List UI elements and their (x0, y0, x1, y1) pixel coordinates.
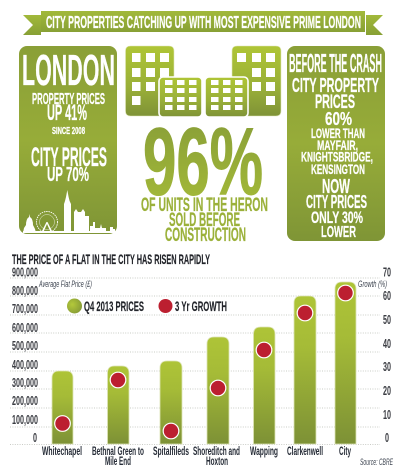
left axis labels: 700,000 (12, 302, 38, 316)
right axis labels: 50 (383, 313, 391, 327)
icon: centre left building (159, 77, 202, 117)
panel: before the crash: MAYFAIR, (317, 138, 358, 153)
bar: Wapping (254, 327, 275, 444)
bar: City (335, 282, 356, 444)
panel: London prices (19, 46, 117, 234)
left axis labels: 500,000 (12, 339, 38, 353)
right axis labels: 10 (383, 408, 391, 422)
panel: London prices: CITY PRICES (31, 142, 107, 172)
legend: 3 Yr GROWTH (175, 298, 227, 314)
icon: left tall building (126, 46, 174, 116)
text: LONDON (22, 46, 115, 95)
statistic caption: CONSTRUCTION (165, 225, 246, 246)
panel: London prices: SINCE 2008 (52, 126, 85, 137)
statistic caption: OF UNITS IN THE HERON (141, 195, 268, 216)
axis title: average flat price: Average Flat Price (£) (38, 279, 92, 289)
icon: London skyline (23, 190, 115, 233)
category labels: Wapping (250, 446, 278, 458)
right axis labels: 40 (383, 337, 391, 351)
category labels: Bethnal Green to (92, 446, 144, 458)
panel: before the crash: ONLY 30% (311, 208, 363, 227)
right axis labels: 60 (383, 289, 391, 303)
panel: before the crash: 60% (325, 109, 352, 129)
icon: centre right building (205, 77, 248, 117)
right axis labels: 70 (383, 266, 391, 280)
panel: before the crash: PRICES (315, 91, 355, 113)
category labels: Mile End (105, 456, 131, 468)
category labels: Spitalfileds (153, 446, 189, 458)
panel: London prices: UP 70% (47, 163, 89, 186)
category labels: City (339, 446, 351, 458)
right axis labels: 0 (385, 431, 389, 445)
legend: Q4 2013 PRICES (84, 298, 144, 314)
left axis labels: 200,000 (12, 394, 38, 408)
left axis labels (12, 266, 38, 445)
panel: before the crash: LOWER (321, 224, 356, 241)
panel: before the crash: KENSINGTON (311, 162, 365, 177)
big statistic 96%: 96% (143, 108, 263, 216)
category labels: Hoxton (206, 456, 228, 468)
category labels: Shoreditch and (193, 446, 240, 458)
right axis labels: 20 (383, 384, 391, 398)
legend (67, 298, 227, 314)
statistic caption: SOLD BEFORE (169, 210, 240, 231)
left axis labels: 100,000 (12, 413, 38, 427)
panel: London prices: UP 41% (47, 100, 87, 125)
icon: right tall building (232, 46, 281, 116)
panel: before the crash: LOWER THAN (311, 126, 365, 141)
left axis labels: 800,000 (12, 284, 38, 298)
panel: London prices: PROPERTY PRICES (32, 91, 105, 108)
left axis labels: 0 (33, 431, 37, 445)
chart heading: THE PRICE OF A FLAT IN THE CITY HAS RISEN RAPIDLY (12, 251, 210, 267)
left axis labels: 600,000 (12, 321, 38, 335)
bar: Shoreditch and Hoxton (207, 337, 229, 444)
category labels: Clarkenwell (287, 446, 323, 458)
right axis labels (383, 266, 391, 445)
bar: Whitechapel (52, 371, 73, 444)
left axis labels: 400,000 (12, 358, 38, 372)
left axis labels: 900,000 (12, 266, 38, 280)
icon: buildings (126, 46, 281, 117)
bar: Spitalfields (160, 361, 182, 444)
panel: before the crash (287, 46, 385, 241)
category labels: Whitechapel (42, 446, 82, 458)
category labels (42, 446, 351, 468)
right axis labels: 30 (383, 360, 391, 374)
bar chart (10, 266, 391, 468)
left axis labels: 300,000 (12, 376, 38, 390)
bar: Clarkenwell (294, 296, 316, 444)
panel: before the crash: NOW (322, 175, 350, 198)
bar: Bethnal Green to Mile End (108, 366, 129, 444)
statistic caption (141, 195, 268, 246)
